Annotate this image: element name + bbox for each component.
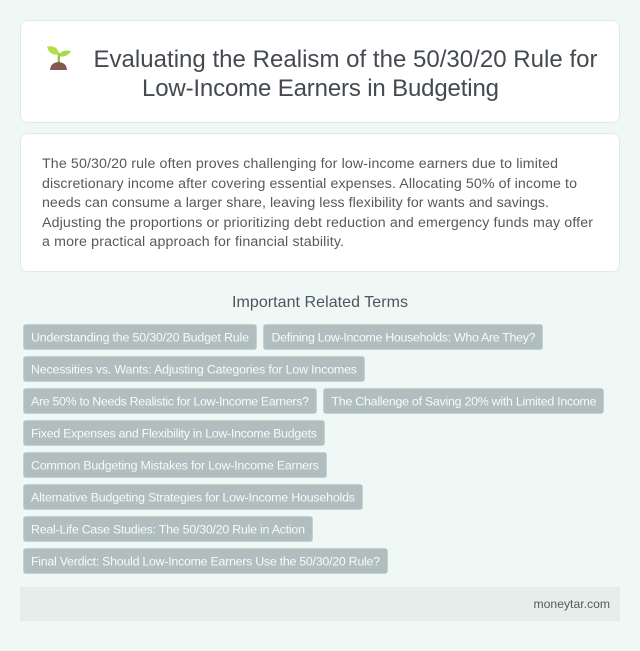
tag 3: Necessities vs. Wants: Adjusting Categories for Low Incomes: [31, 362, 357, 376]
tag 2: [264, 324, 542, 350]
tag 6: Fixed Expenses and Flexibility in Low-Income Budgets: [31, 426, 317, 440]
tag 5: [324, 388, 604, 414]
tag 10: [24, 548, 388, 574]
tag list: [24, 324, 604, 574]
tag 6: [24, 420, 324, 446]
summary text: discretionary income after covering essential expenses. Allocating 50% of income to: [42, 176, 577, 192]
panel: header: [20, 20, 620, 122]
tag 2: Defining Low-Income Households: Who Are They?: [272, 330, 536, 344]
tag 4: [24, 388, 316, 414]
summary text: Adjusting the proportions or prioritizing debt reduction and emergency funds may offer: [42, 215, 593, 231]
footer source text: moneytar.com: [534, 597, 610, 611]
tag 5: The Challenge of Saving 20% with Limited Income: [332, 394, 597, 408]
title: Low-Income Earners in Budgeting: [142, 75, 499, 102]
tag 3: [24, 356, 364, 382]
heading: important related terms: Important Related Terms: [232, 294, 408, 311]
tag 8: Alternative Budgeting Strategies for Low-Income Households: [31, 490, 355, 504]
title: Evaluating the Realism of the 50/30/20 Rule for: [94, 46, 598, 73]
tag 7: Common Budgeting Mistakes for Low-Income Earners: [31, 458, 319, 472]
tag 7: [24, 452, 326, 478]
tag 8: [24, 484, 362, 510]
icon: sprout: [47, 46, 71, 70]
tag 10: Final Verdict: Should Low-Income Earners Use the 50/30/20 Rule?: [31, 554, 380, 568]
panel: summary: [20, 134, 620, 272]
summary text: The 50/30/20 rule often proves challenging for low-income earners due to limited: [42, 156, 558, 172]
tag 9: [24, 516, 312, 542]
tag 1: Understanding the 50/30/20 Budget Rule: [31, 330, 249, 344]
tag 4: Are 50% to Needs Realistic for Low-Income Earners?: [31, 394, 309, 408]
summary text: needs can consume a larger share, leaving less flexibility for wants and savings.: [42, 195, 549, 211]
summary text: [42, 156, 593, 250]
footer: [20, 587, 620, 621]
summary text: a more practical approach for financial stability.: [42, 234, 344, 250]
tag 9: Real-Life Case Studies: The 50/30/20 Rule in Action: [31, 522, 305, 536]
tag 1: [24, 324, 256, 350]
title: [94, 46, 598, 102]
